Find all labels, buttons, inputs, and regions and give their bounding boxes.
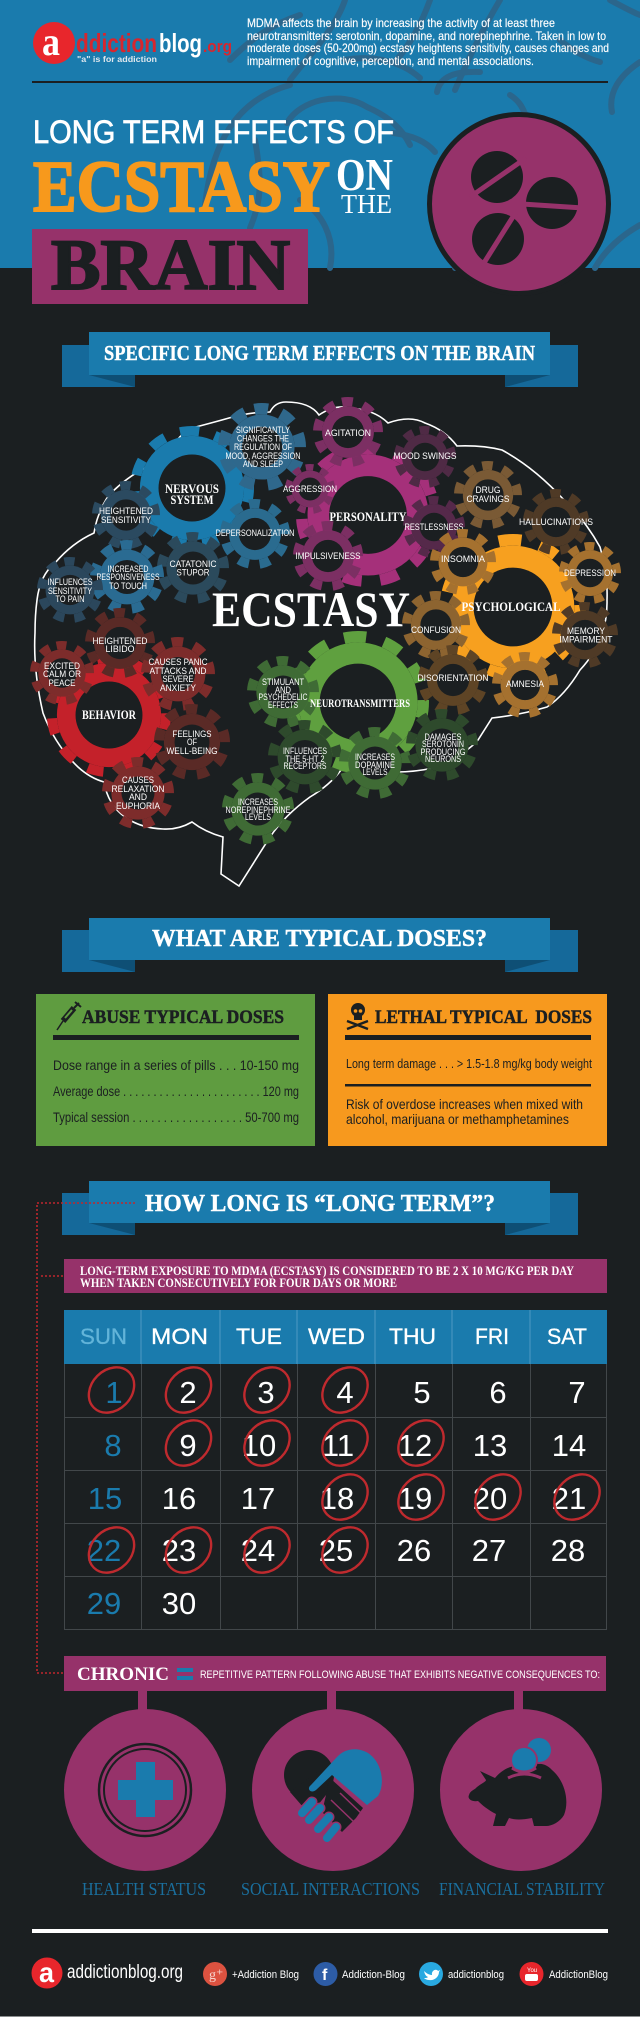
gear: influences 5-HT 2 receptors bbox=[267, 719, 343, 795]
big gear: nervous system bbox=[127, 423, 257, 553]
panel: abuse typical doses: ABUSE TYPICAL DOSES bbox=[82, 1007, 284, 1028]
gear: causes relaxation and euphoria: AND bbox=[129, 792, 147, 802]
gear: damages serotonin neurons: PRODUCING bbox=[420, 747, 466, 757]
calendar dates: 24 bbox=[241, 1533, 275, 1568]
big gear: psychological bbox=[436, 530, 590, 684]
gear: increased responsiveness: RESPONSIVENESS bbox=[96, 572, 160, 582]
label: psychological: PSYCHOLOGICAL bbox=[462, 599, 561, 614]
calendar dates: 19 bbox=[398, 1481, 432, 1516]
gear: stimulant effects: PSYCHEDELIC bbox=[258, 692, 308, 702]
calendar header: TUE bbox=[236, 1324, 282, 1349]
gear: increases dopamine: INCREASES bbox=[355, 752, 395, 762]
gear: feelings of well-being: OF bbox=[187, 737, 197, 747]
gear: increases norepinephrine: INCREASES bbox=[238, 797, 278, 807]
calendar dates: 3 bbox=[257, 1375, 275, 1410]
brain outline bbox=[35, 402, 607, 886]
gear: causes panic attacks: SEVERE bbox=[162, 674, 194, 684]
ribbon: specific effects bbox=[62, 332, 578, 387]
gear: hallucinations: HALLUCINATIONS bbox=[519, 517, 593, 527]
logo: ddiction bbox=[76, 28, 157, 58]
gear: damages serotonin neurons: SEROTONIN bbox=[422, 739, 464, 749]
gear: causes panic attacks: ANXIETY bbox=[160, 683, 196, 693]
label: ecstasy: ECSTASY bbox=[212, 581, 410, 637]
gear: heightened libido: LIBIDO bbox=[106, 644, 134, 654]
calendar dates: 1 bbox=[105, 1375, 123, 1410]
logo: .org bbox=[203, 37, 232, 56]
gear: causes relaxation and euphoria: CAUSES bbox=[122, 775, 154, 785]
gear: memory impairment: IMPAIRMENT bbox=[560, 634, 613, 644]
ribbon: typical doses: WHAT ARE TYPICAL DOSES? bbox=[152, 926, 487, 952]
gear: increased responsiveness bbox=[89, 539, 165, 615]
dotted connector bbox=[37, 1203, 135, 1673]
gear: restlessness bbox=[402, 495, 466, 559]
calendar dates: 17 bbox=[241, 1481, 275, 1516]
panel: abuse typical doses bbox=[36, 994, 315, 1146]
gear: damages serotonin neurons: NEURONS bbox=[425, 754, 461, 764]
gear: memory impairment bbox=[551, 601, 619, 669]
calendar header: FRI bbox=[475, 1324, 509, 1349]
calendar dates: 20 bbox=[473, 1481, 507, 1516]
gear: causes panic attacks: ATTACKS AND bbox=[150, 666, 207, 676]
gear: influences 5-HT 2 receptors: RECEPTORS bbox=[284, 761, 326, 771]
calendar dates: 23 bbox=[162, 1533, 196, 1568]
gear: catatonic stupor: STUPOR bbox=[176, 568, 210, 578]
gear: hallucinations bbox=[519, 488, 593, 556]
calendar dates: 13 bbox=[473, 1428, 507, 1463]
big gear: nervous system: NERVOUS bbox=[165, 481, 219, 496]
gear: causes relaxation and euphoria bbox=[101, 756, 175, 830]
panel: abuse typical doses: Average dose . . . . . . . . . . . . . . . . . . . . . . . 120 mg bbox=[53, 1083, 299, 1099]
gear: influences 5-HT 2 receptors: INFLUENCES bbox=[283, 746, 327, 756]
logo: a bbox=[42, 19, 60, 64]
google plus link: g⁺ bbox=[209, 1968, 223, 1983]
twitter link bbox=[419, 1962, 504, 1986]
calendar dates: 8 bbox=[104, 1428, 122, 1463]
gear: catatonic stupor: CATATONIC bbox=[170, 559, 217, 569]
google plus link bbox=[203, 1962, 299, 1986]
gear: significantly changes: REGULATION OF bbox=[234, 442, 292, 452]
calendar dates: 15 bbox=[88, 1481, 122, 1516]
gear: increased responsiveness: INCREASED bbox=[108, 564, 149, 574]
gear: impulsiveness bbox=[292, 520, 364, 592]
calendar header: THU bbox=[389, 1324, 436, 1349]
gear: significantly changes: CHANGES THE bbox=[237, 434, 289, 444]
gear: influences sensitivity bbox=[36, 556, 104, 624]
red circled days bbox=[80, 1358, 609, 1582]
gear: confusion: CONFUSION bbox=[411, 625, 461, 635]
title: ON bbox=[336, 150, 393, 200]
gear: influences sensitivity: SENSITIVITY bbox=[48, 586, 92, 596]
big gear: personality: PERSONALITY bbox=[330, 509, 407, 524]
calendar dates: 25 bbox=[319, 1533, 353, 1568]
gear: significantly changes: SIGNIFICANTLY bbox=[236, 425, 290, 435]
logo bbox=[33, 19, 232, 64]
callout: long-term exposure: WHEN TAKEN CONSECUTIVELY FOR FOUR DAYS OR MORE bbox=[80, 1276, 397, 1290]
icon: health status bbox=[64, 1709, 226, 1871]
calendar dates: 5 bbox=[413, 1375, 431, 1410]
panel: abuse typical doses: Typical session . . . . . . . . . . . . . . . . . . 50-700 mg bbox=[53, 1109, 299, 1125]
gear: influences sensitivity: INFLUENCES bbox=[48, 577, 92, 587]
gear: insomnia bbox=[429, 528, 497, 596]
facebook link bbox=[314, 1962, 405, 1986]
calendar dates: 27 bbox=[472, 1533, 506, 1568]
gear: stimulant effects: EFFECTS bbox=[268, 700, 298, 710]
calendar dates: 11 bbox=[322, 1428, 354, 1463]
gear: feelings of well-being bbox=[153, 703, 231, 781]
calendar header: SAT bbox=[547, 1324, 587, 1349]
gear: increases dopamine: DOPAMINE bbox=[355, 760, 395, 770]
calendar dates: 10 bbox=[242, 1428, 276, 1463]
youtube link: AddictionBlog bbox=[549, 1969, 608, 1981]
gear: significantly changes bbox=[217, 402, 307, 492]
ribbon: typical doses bbox=[62, 918, 578, 972]
panel: lethal typical doses: Long term damage . . . > 1.5-1.8 mg/kg body weight bbox=[346, 1056, 592, 1071]
calendar dates: 2 bbox=[179, 1375, 197, 1410]
calendar dates: 12 bbox=[398, 1428, 432, 1463]
ribbon: how long is long term: HOW LONG IS “LONG TERM”? bbox=[145, 1191, 495, 1217]
facebook link: Addiction-Blog bbox=[342, 1969, 405, 1981]
gear: confusion bbox=[401, 590, 471, 660]
calendar header: SUN bbox=[80, 1324, 127, 1349]
twitter link: addictionblog bbox=[448, 1969, 504, 1981]
gear: influences sensitivity: TO PAIN bbox=[56, 594, 84, 604]
icon: social interactions handshake bbox=[252, 1709, 414, 1871]
panel: lethal typical doses: alcohol, marijuana or methamphetamines bbox=[346, 1111, 569, 1127]
title: LONG TERM EFFECTS OF bbox=[33, 114, 394, 150]
gear: mood swings bbox=[393, 425, 457, 489]
gear: agitation bbox=[312, 396, 384, 468]
gear: depression bbox=[558, 541, 622, 605]
gear: depersonalization bbox=[216, 498, 294, 570]
panel: lethal typical doses: Risk of overdose increases when mixed with bbox=[346, 1096, 583, 1112]
calendar dates: 9 bbox=[179, 1428, 197, 1463]
gear: significantly changes: MOOD, AGGRESSION bbox=[226, 451, 300, 461]
ribbon: specific effects: SPECIFIC LONG TERM EFFECTS ON THE BRAIN bbox=[104, 341, 535, 365]
footer bbox=[32, 1957, 608, 1988]
big gear: behavior bbox=[44, 650, 174, 780]
calendar bbox=[64, 1310, 609, 1630]
calendar header: WED bbox=[308, 1324, 365, 1349]
calendar dates: 28 bbox=[551, 1533, 585, 1568]
title: THE bbox=[341, 189, 392, 219]
gear: causes relaxation and euphoria: EUPHORIA bbox=[116, 801, 160, 811]
gear: catatonic stupor bbox=[156, 531, 230, 605]
gear: causes relaxation and euphoria: RELAXATION bbox=[112, 784, 164, 794]
calendar dates: 26 bbox=[397, 1533, 431, 1568]
callout: long-term exposure: LONG-TERM EXPOSURE TO MDMA (ECSTASY) IS CONSIDERED TO BE 2 X 10 MG/KG PER DAY bbox=[80, 1264, 574, 1278]
gear: increased responsiveness: TO TOUCH bbox=[109, 581, 147, 591]
icon: financial stability piggy bank bbox=[440, 1709, 602, 1871]
logo: blog bbox=[159, 28, 202, 58]
big gear: behavior: BEHAVIOR bbox=[82, 707, 136, 722]
label: health status: HEALTH STATUS bbox=[82, 1879, 206, 1899]
big gear: neurotransmitters bbox=[283, 627, 433, 777]
youtube link: You bbox=[527, 1968, 537, 1974]
calendar dates: 14 bbox=[552, 1428, 586, 1463]
gear: significantly changes: AND SLEEP bbox=[243, 459, 283, 469]
callout: long-term exposure bbox=[64, 1259, 607, 1293]
gear: stimulant effects: STIMULANT bbox=[262, 677, 304, 687]
gear: drug cravings: CRAVINGS bbox=[466, 494, 510, 504]
gear: heightened sensitivity: HEIGHTENED bbox=[99, 506, 153, 516]
gear: amnesia bbox=[491, 651, 559, 719]
gear: agitation: AGITATION bbox=[325, 428, 371, 438]
gear: impulsiveness: IMPULSIVENESS bbox=[296, 551, 360, 561]
calendar dates: 6 bbox=[489, 1375, 507, 1410]
big gear: nervous system: SYSTEM bbox=[170, 492, 214, 507]
gear: excited calm or peace: EXCITED bbox=[44, 661, 80, 671]
label: neurotransmitters: NEUROTRANSMITTERS bbox=[310, 696, 410, 710]
gear: excited calm or peace: PEACE bbox=[48, 678, 76, 688]
label: social interactions: SOCIAL INTERACTIONS bbox=[241, 1879, 420, 1899]
facebook link: f bbox=[322, 1967, 328, 1984]
calendar dates: 30 bbox=[162, 1586, 196, 1621]
gear: heightened libido: HEIGHTENED bbox=[92, 636, 148, 646]
gear: stimulant effects bbox=[246, 655, 320, 729]
panel: lethal typical doses: LETHAL TYPICAL DOSES bbox=[375, 1007, 592, 1028]
gear: heightened sensitivity bbox=[91, 480, 161, 550]
gear: drug cravings: DRUG bbox=[476, 485, 500, 495]
header background bbox=[0, 0, 640, 268]
chronic banner: CHRONIC bbox=[77, 1664, 169, 1685]
gear: feelings of well-being: FEELINGS bbox=[172, 729, 212, 739]
gear: excited calm or peace: CALM OR bbox=[43, 669, 81, 679]
gear: damages serotonin neurons bbox=[405, 708, 479, 782]
gear: disorientation bbox=[417, 644, 489, 716]
gear: memory impairment: MEMORY bbox=[567, 626, 605, 636]
title: BRAIN bbox=[51, 225, 290, 305]
gear: restlessness: RESTLESSNESS bbox=[404, 522, 464, 532]
google plus link: +Addiction Blog bbox=[232, 1969, 299, 1981]
gear: drug cravings bbox=[453, 460, 523, 530]
calendar dates: 29 bbox=[87, 1586, 121, 1621]
calendar header bbox=[64, 1310, 607, 1364]
gear: influences 5-HT 2 receptors: THE 5-HT 2 bbox=[286, 754, 324, 764]
calendar dates: 16 bbox=[162, 1481, 196, 1516]
calendar dates: 22 bbox=[87, 1533, 121, 1568]
footer logo: addictionblog.org bbox=[67, 1962, 183, 1983]
intro text: neurotransmitters: serotonin, dopamine, and norepinephrine. Taken in low to bbox=[247, 29, 606, 43]
gear: aggression bbox=[283, 463, 337, 515]
gear: excited calm or peace bbox=[29, 640, 95, 706]
footer logo: a bbox=[39, 1957, 54, 1988]
gear: mood swings: MOOD SWINGS bbox=[394, 451, 456, 461]
gear: depression: DEPRESSION bbox=[564, 568, 616, 578]
gear: damages serotonin neurons: DAMAGES bbox=[424, 732, 462, 742]
icon: syringe bbox=[57, 1002, 81, 1030]
gear: causes panic attacks: CAUSES PANIC bbox=[148, 657, 208, 667]
gear: amnesia: AMNESIA bbox=[506, 679, 544, 689]
gear: increases dopamine bbox=[338, 726, 412, 800]
gear: disorientation: DISORIENTATION bbox=[418, 673, 488, 683]
calendar dates: 4 bbox=[336, 1375, 354, 1410]
youtube link bbox=[520, 1962, 608, 1986]
gear: increases norepinephrine bbox=[221, 772, 295, 846]
gear: stimulant effects: AND bbox=[275, 685, 291, 695]
calendar header: MON bbox=[151, 1324, 208, 1349]
big gear: personality bbox=[292, 439, 444, 591]
calendar dates: 21 bbox=[552, 1481, 586, 1516]
intro text bbox=[247, 16, 609, 68]
icon: pills bbox=[430, 114, 608, 294]
gear: aggression: AGGRESSION bbox=[283, 484, 337, 494]
logo: "a" is for addiction bbox=[77, 54, 157, 64]
panel: lethal typical doses bbox=[328, 994, 607, 1146]
title: ECSTASY bbox=[33, 146, 330, 227]
title bbox=[32, 114, 394, 305]
label: financial stability: FINANCIAL STABILITY bbox=[439, 1879, 605, 1899]
calendar dates bbox=[87, 1375, 586, 1621]
gear: causes panic attacks bbox=[140, 636, 216, 712]
gear: insomnia: INSOMNIA bbox=[441, 554, 485, 564]
ribbon: how long is long term bbox=[62, 1181, 578, 1235]
gear: increases norepinephrine: NOREPINEPHRINE bbox=[226, 805, 290, 815]
panel: abuse typical doses: Dose range in a series of pills . . . 10-150 mg bbox=[53, 1057, 299, 1073]
intro text: MDMA affects the brain by increasing the activity of at least three bbox=[247, 16, 555, 30]
intro text: impairment of cognitive, perception, and mental associations. bbox=[247, 54, 534, 68]
footer logo bbox=[32, 1957, 183, 1988]
calendar dates: 18 bbox=[320, 1481, 354, 1516]
gear: heightened libido bbox=[84, 607, 156, 679]
gear: depersonalization: DEPERSONALIZATION bbox=[216, 528, 294, 538]
gear: feelings of well-being: WELL-BEING bbox=[166, 746, 218, 756]
calendar dates: 7 bbox=[568, 1375, 586, 1410]
gear: increases norepinephrine: LEVELS bbox=[245, 812, 271, 822]
gear: increases dopamine: LEVELS bbox=[362, 767, 388, 777]
icon: skull and crossbones bbox=[347, 1003, 368, 1029]
gear: heightened sensitivity: SENSITIVITY bbox=[101, 515, 151, 525]
chronic banner bbox=[64, 1656, 606, 1711]
